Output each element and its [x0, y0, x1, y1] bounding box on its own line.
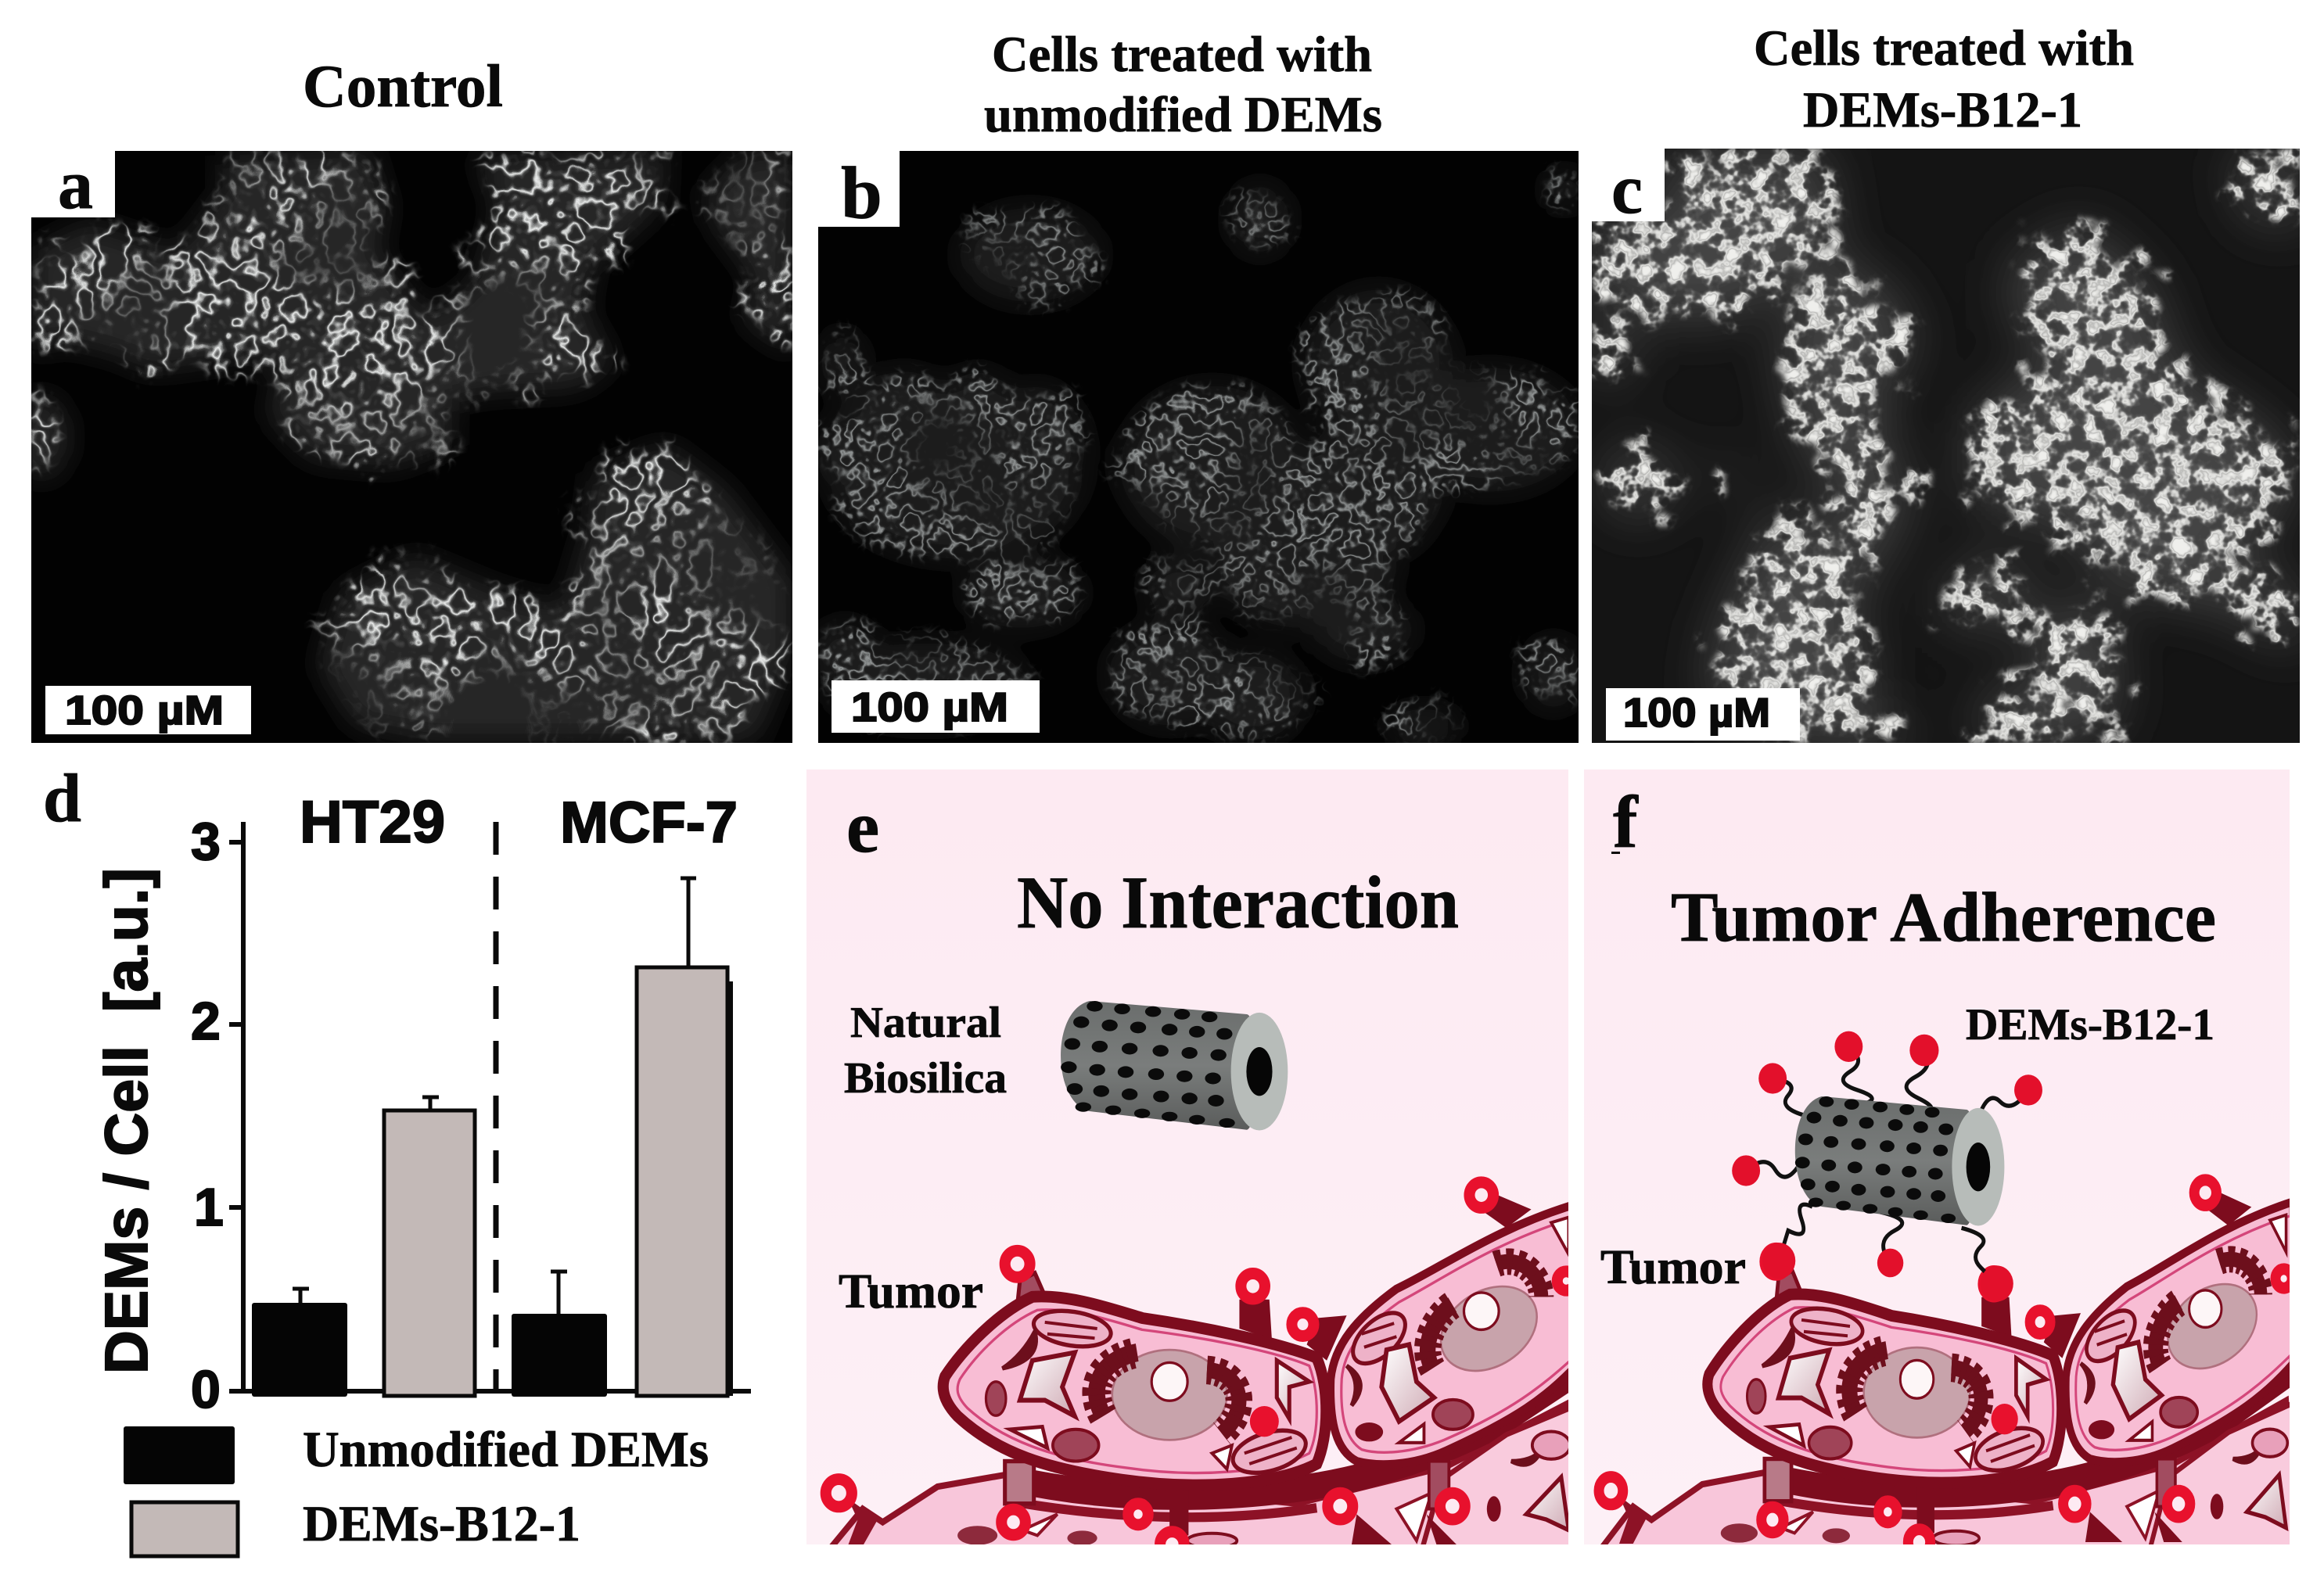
scale bar b: 100 µM	[851, 685, 1008, 730]
label: Tumor: Tumor	[839, 1265, 983, 1318]
scale bar b	[832, 680, 1040, 733]
title: Tumor Adherence: Tumor Adherence	[1671, 879, 2216, 956]
heading: DEMs-B12-1 column	[1754, 20, 2134, 138]
axis ticks: 0	[191, 1360, 221, 1419]
heading: unmodified DEMs column: Cells treated with	[992, 27, 1372, 83]
bar HT29 unmodified	[252, 1289, 347, 1397]
scale bar c: 100 µM	[1623, 691, 1770, 736]
heading: unmodified DEMs column	[984, 27, 1382, 143]
label: DEMs-B12-1: DEMs-B12-1	[1966, 1000, 2214, 1049]
panel d: bar chart	[43, 761, 751, 1556]
label: Tumor: Tumor	[1600, 1241, 1746, 1294]
heading: Control: Control	[303, 52, 503, 120]
scale bar a	[45, 686, 251, 734]
label f: f	[1613, 780, 1639, 863]
scale bar a: 100 µM	[65, 688, 224, 734]
legend	[124, 1422, 709, 1556]
heading: DEMs-B12-1 column: DEMs-B12-1	[1803, 82, 2082, 138]
bar MCF-7 B12-1	[637, 878, 731, 1396]
panel a: control micrograph	[15, 146, 793, 743]
title: No Interaction: No Interaction	[1017, 861, 1459, 944]
label e: e	[846, 785, 879, 868]
icon: biosilica cylinder	[1061, 1001, 1288, 1130]
label: Natural Biosilica: Biosilica	[844, 1054, 1007, 1103]
panel e: no interaction schematic	[806, 769, 1576, 1557]
y axis title: DEMs / Cell [a.u.]	[93, 868, 160, 1374]
tumor cells e	[826, 1182, 1576, 1557]
tumor cells f	[1599, 1180, 2293, 1555]
icon: functionalised cylinder with ligands	[1732, 1031, 2042, 1301]
axes	[229, 822, 751, 1391]
axis ticks: 2	[191, 992, 221, 1051]
group title MCF-7: MCF-7	[560, 790, 738, 855]
axis ticks	[191, 812, 224, 1419]
scale bar c	[1606, 688, 1800, 741]
label: Natural Biosilica: Natural	[850, 999, 1001, 1047]
label d: d	[43, 761, 81, 837]
label a	[31, 146, 115, 224]
legend: Unmodified DEMs	[303, 1422, 709, 1478]
legend: DEMs-B12-1	[303, 1496, 580, 1552]
axis ticks: 1	[194, 1178, 224, 1237]
label b: b	[841, 152, 882, 235]
label b	[818, 151, 900, 235]
panel c: DEMs-B12-1 micrograph	[1585, 149, 2301, 752]
label c	[1592, 149, 1665, 228]
heading: DEMs-B12-1 column: Cells treated with	[1754, 20, 2134, 77]
label: Natural Biosilica	[844, 999, 1007, 1103]
bar HT29 B12-1	[384, 1097, 475, 1396]
panel b: unmodified DEMs micrograph	[812, 151, 1583, 744]
panel f: tumor adherence schematic	[1584, 769, 2293, 1555]
divider	[493, 822, 499, 1390]
axis ticks: 3	[191, 812, 221, 871]
group title HT29: HT29	[300, 789, 445, 856]
bar MCF-7 unmodified	[512, 1272, 607, 1397]
label a: a	[58, 146, 93, 224]
label c: c	[1611, 151, 1643, 228]
heading: unmodified DEMs column: unmodified DEMs	[984, 87, 1382, 143]
